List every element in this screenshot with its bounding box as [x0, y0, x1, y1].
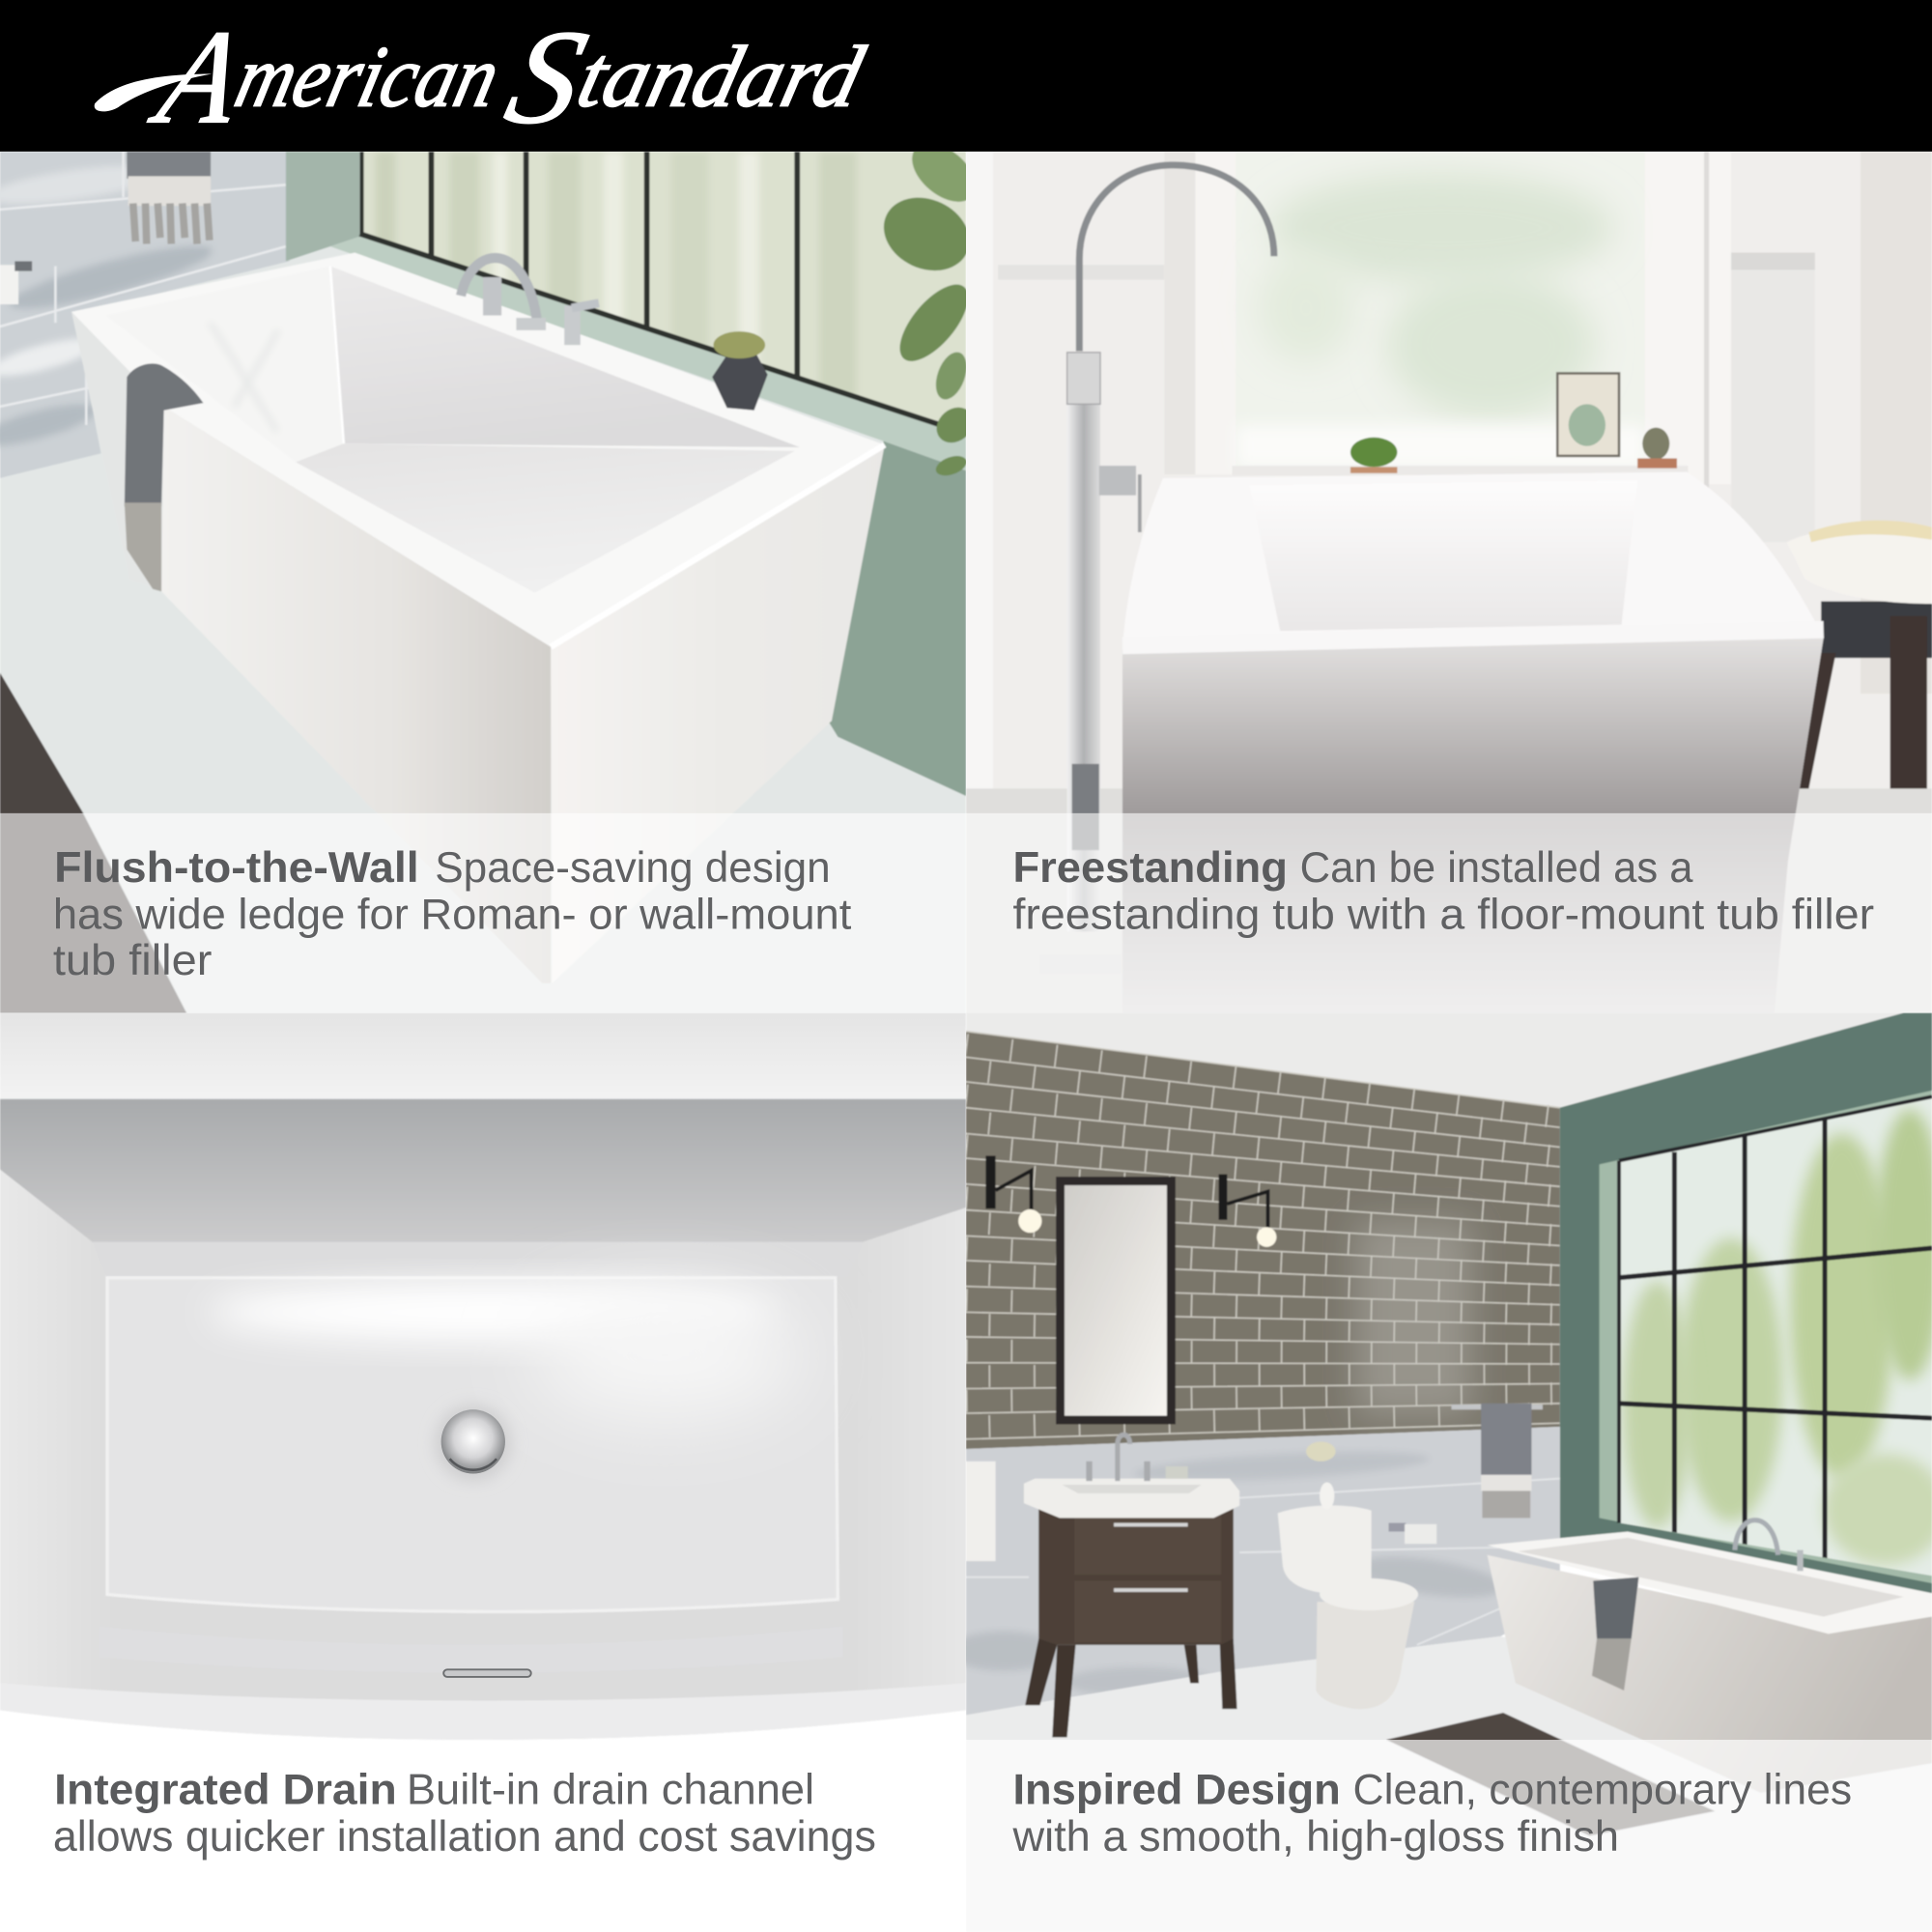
caption band — [966, 1740, 1932, 1932]
caption: flush-to-the-wall — [54, 850, 851, 976]
panel: inspired design — [949, 1012, 1932, 1932]
toilet — [1278, 1505, 1418, 1709]
plant leaves — [883, 152, 966, 476]
caption: flush-to-the-wall: Space-saving design — [435, 844, 831, 892]
ledge with plants and frame — [1233, 373, 1688, 475]
logo: American Standard: A — [139, 3, 258, 152]
ceiling — [966, 1012, 1932, 1173]
photo: freestanding tub and floor-mount filler — [966, 152, 1932, 1014]
marble lower wall — [949, 1427, 1560, 1716]
tub basin — [210, 268, 798, 582]
marble wall — [0, 152, 290, 478]
floor — [966, 788, 1932, 1014]
towel bar towel — [1452, 1404, 1543, 1518]
tub rim back — [0, 1012, 966, 1099]
logo: American Standard: S — [494, 2, 600, 152]
caption: freestanding — [1012, 844, 1874, 939]
window reveal — [1600, 1091, 1932, 1583]
succulent pot — [712, 331, 768, 411]
header bar — [0, 0, 1932, 152]
caption: inspired design: Inspired Design — [1012, 1766, 1341, 1813]
logo: American Standard: merican — [227, 28, 509, 125]
vanity — [1024, 1435, 1239, 1737]
tub floor — [107, 1278, 838, 1611]
caption: integrated drain: Integrated Drain — [54, 1766, 397, 1813]
photo: full bathroom — [949, 1012, 1932, 1932]
window with trees — [359, 152, 966, 438]
caption: inspired design: Clean, contemporary lines — [1353, 1766, 1852, 1813]
wall trim — [966, 152, 1932, 817]
window with blurred trees — [1236, 152, 1645, 469]
front channel — [99, 1627, 842, 1673]
toilet paper — [1389, 1523, 1436, 1544]
caption: flush-to-the-wall: has wide ledge for Roman- or wall-mount — [53, 892, 852, 939]
photo: bathroom with tub by window — [0, 131, 986, 1014]
rug — [1386, 1713, 1716, 1836]
tub — [1122, 472, 1824, 1014]
sill — [330, 237, 966, 470]
faucet — [461, 258, 599, 345]
photo: tub interior from above — [0, 1012, 966, 1740]
green wall — [1560, 1012, 1932, 1602]
caption band — [0, 813, 966, 1014]
panel: freestanding tub — [966, 152, 1932, 1014]
towel on ring — [966, 1462, 996, 1561]
green wall — [828, 441, 966, 796]
logo: American Standard — [95, 2, 879, 152]
caption: integrated drain: allows quicker installation and cost savings — [53, 1813, 876, 1861]
stool and folded towel — [1786, 521, 1932, 912]
caption: freestanding: Can be installed as a — [1300, 844, 1693, 892]
draped towel — [125, 363, 203, 591]
green recess — [286, 152, 359, 261]
bath tub — [1488, 1520, 1932, 1793]
caption: freestanding: freestanding tub with a floor-mount tub filler — [1012, 892, 1874, 939]
caption: integrated drain: Built-in drain channel — [407, 1766, 814, 1813]
back wall — [0, 1099, 966, 1242]
dark rug — [0, 672, 187, 1014]
floor-mount tub filler — [1040, 165, 1274, 974]
subway tile wall — [966, 1032, 1560, 1449]
tub side walls — [0, 1099, 966, 1740]
panel: integrated drain — [0, 1012, 966, 1932]
tub exterior — [71, 252, 885, 983]
caption: flush-to-the-wall: tub filler — [53, 937, 213, 984]
mirror — [1056, 1177, 1176, 1424]
wall sconces — [985, 1155, 1276, 1247]
icon: overflow plate — [443, 1669, 531, 1677]
caption band — [966, 813, 1932, 1014]
caption: freestanding: Freestanding — [1012, 844, 1288, 892]
tile gloss reflection — [1355, 1220, 1472, 1417]
icon: drain stopper — [435, 1405, 511, 1481]
caption: integrated drain — [53, 1766, 876, 1861]
caption: inspired design: with a smooth, high-gloss finish — [1011, 1813, 1619, 1861]
caption: inspired design — [1011, 1766, 1852, 1861]
caption: flush-to-the-wall: Flush-to-the-Wall — [54, 844, 419, 892]
toilet paper holder — [0, 261, 32, 304]
hanging towel on wall — [127, 152, 211, 244]
window with trees — [1619, 1096, 1932, 1576]
vase — [1306, 1441, 1336, 1509]
floor — [966, 1636, 1932, 1932]
panel: flush-to-the-wall tub — [0, 131, 986, 1014]
logo: American Standard: tandard — [569, 29, 872, 126]
